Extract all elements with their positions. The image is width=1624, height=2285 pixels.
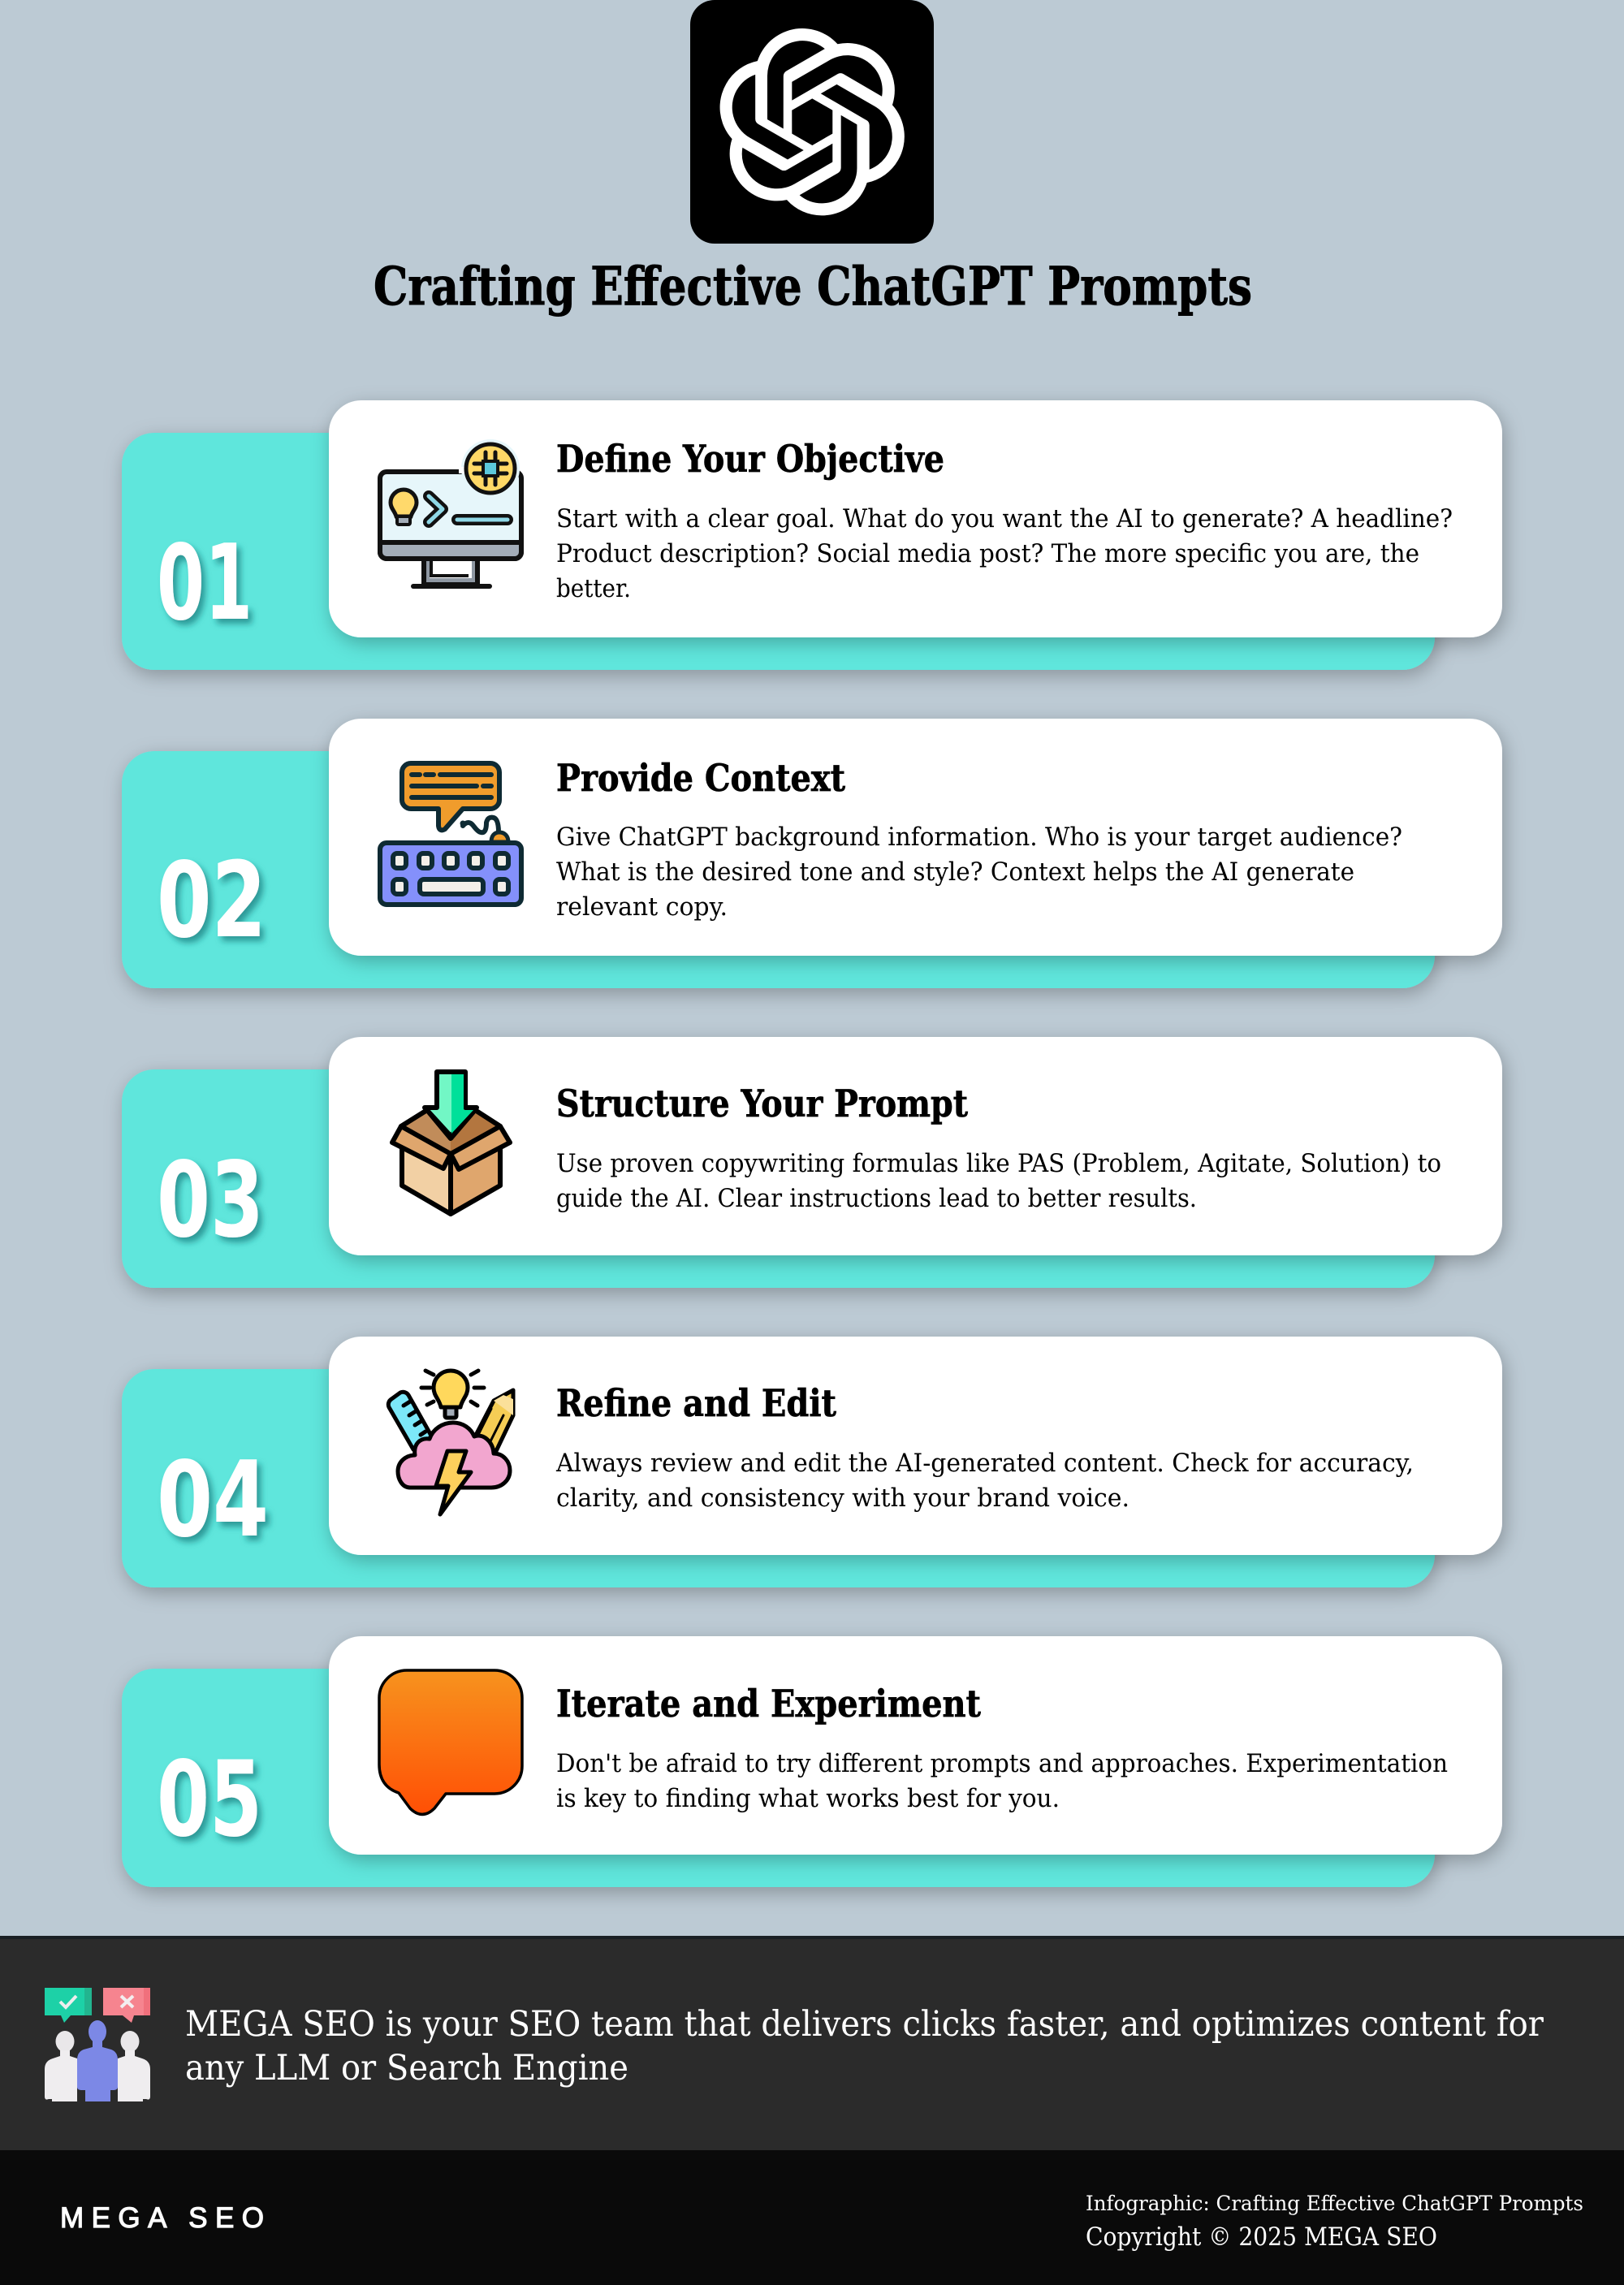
icon: speech bubble and keyboard (380, 763, 521, 905)
brand wordmark: MEGA SEO (60, 2202, 264, 2234)
banner text (185, 2004, 1544, 2088)
number 05: 05 (157, 1739, 262, 1860)
heading: Iterate and Experiment (556, 1682, 982, 1726)
panel: step 03 structure your prompt (122, 1037, 1502, 1288)
footer (0, 2150, 1624, 2285)
description: better. (556, 574, 631, 603)
description: Give ChatGPT background information. Who is your target audience? (556, 823, 1402, 852)
description: What is the desired tone and style? Context helps the AI generate (556, 857, 1354, 887)
description: is key to finding what works best for you. (556, 1784, 1060, 1813)
description (556, 1149, 1441, 1213)
panel: step 01 define your objective (122, 400, 1502, 670)
description: Always review and edit the AI-generated content. Check for accuracy, (555, 1449, 1414, 1478)
heading: Structure Your Prompt (556, 1082, 969, 1125)
infographic credit: Copyright © 2025 MEGA SEO (1086, 2222, 1437, 2252)
panel: step 02 provide context (122, 719, 1502, 988)
icon: orange speech bubble (379, 1670, 522, 1814)
icon: team with approve and reject bubbles (45, 1988, 150, 2101)
description (556, 823, 1402, 922)
banner text: any LLM or Search Engine (185, 2048, 628, 2088)
description: relevant copy. (556, 892, 728, 922)
number 04: 04 (157, 1440, 269, 1561)
infographic credit: Infographic: Crafting Effective ChatGPT Prompts (1086, 2192, 1583, 2215)
panel: step 05 iterate and experiment (122, 1636, 1502, 1887)
description (555, 1449, 1414, 1513)
number 02: 02 (157, 840, 266, 961)
description: Use proven copywriting formulas like PAS (Problem, Agitate, Solution) to (556, 1149, 1441, 1178)
banner: MEGA SEO pitch (0, 1936, 1624, 2150)
heading: Define Your Objective (556, 437, 944, 481)
icon: cloud, bulb, ruler and pencil (388, 1371, 513, 1514)
logo: ChatGPT knot (690, 0, 934, 244)
description: Product description? Social media post? The more specific you are, the (556, 539, 1419, 568)
description (556, 504, 1453, 603)
icon: computer with chip (380, 439, 521, 586)
title: Crafting Effective ChatGPT Prompts (374, 256, 1252, 317)
icon: open box with arrow (392, 1072, 510, 1214)
panel: step 04 refine and edit (122, 1337, 1502, 1587)
number 01: 01 (157, 523, 253, 644)
description (556, 1749, 1448, 1813)
banner text: MEGA SEO is your SEO team that delivers clicks faster, and optimizes content for (185, 2004, 1544, 2045)
description: guide the AI. Clear instructions lead to better results. (556, 1184, 1197, 1213)
description: Start with a clear goal. What do you want the AI to generate? A headline? (556, 504, 1453, 533)
heading: Provide Context (556, 756, 846, 800)
description: clarity, and consistency with your brand voice. (556, 1484, 1129, 1513)
description: Don't be afraid to try different prompts and approaches. Experimentation (556, 1749, 1448, 1778)
infographic credit (1086, 2192, 1583, 2252)
heading: Refine and Edit (556, 1381, 837, 1425)
number 03: 03 (157, 1140, 264, 1261)
